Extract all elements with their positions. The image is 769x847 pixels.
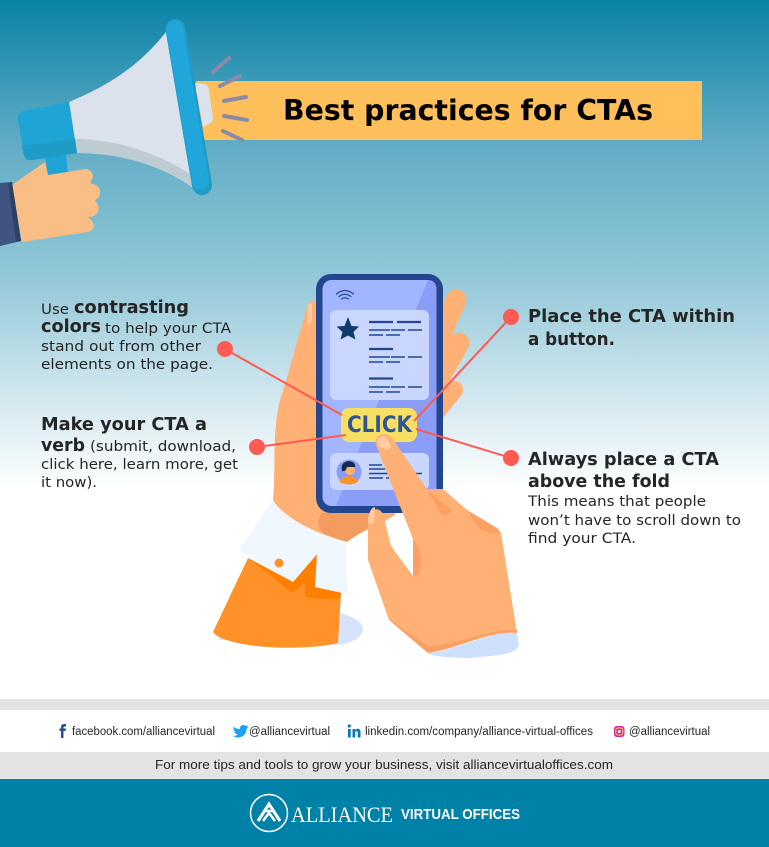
cuff button — [274, 558, 284, 568]
title banner — [196, 81, 702, 140]
left thumb nail — [307, 303, 312, 324]
back fingers — [436, 300, 459, 412]
profile card — [330, 453, 429, 490]
text: make your CTA a verb: it now). — [41, 475, 97, 491]
illustration: hands holding phone — [213, 274, 519, 658]
linkedin text: linkedin.com/company/alliance-virtual-offices — [365, 726, 593, 738]
fingernails — [377, 436, 391, 449]
horn shade — [75, 139, 192, 187]
icon: star — [336, 317, 359, 340]
text: contrasting colors: colors — [41, 316, 101, 337]
text: above the fold: This means that people — [527, 494, 706, 510]
sound streaks — [213, 58, 247, 140]
horn — [69, 32, 192, 187]
sleeve fold — [248, 554, 341, 599]
text: contrasting colors: contrasting — [74, 297, 189, 318]
logo mark — [250, 794, 288, 832]
right hand — [368, 434, 517, 653]
screen sheen — [336, 280, 436, 506]
icon: linkedin — [348, 724, 360, 738]
tips band — [0, 752, 769, 779]
text: place CTA within a button: Place the CTA within — [528, 306, 735, 327]
text: contrasting colors: to help your CTA — [105, 321, 231, 337]
left hand palm — [273, 301, 395, 542]
text: make your CTA a verb: Make your CTA a — [41, 414, 207, 435]
handle — [45, 154, 68, 176]
phone — [316, 274, 443, 513]
card text lines — [369, 322, 422, 392]
footer divider band — [0, 699, 769, 710]
text: make your CTA a verb: (submit, download, — [90, 439, 236, 455]
text: make your CTA a verb — [41, 414, 239, 491]
icon: twitter — [233, 725, 248, 738]
palm shadow — [318, 510, 375, 542]
text: above the fold: Always place a CTA — [528, 449, 719, 470]
callout dots — [217, 309, 519, 466]
text: above the fold: find your CTA. — [528, 531, 636, 547]
text: place CTA within a button: a button. — [528, 329, 615, 350]
CLICK button — [341, 408, 417, 442]
icon: wifi — [336, 290, 354, 299]
text: place CTA within a button — [528, 306, 735, 350]
megaphone back cap — [195, 83, 213, 127]
text: contrasting colors: stand out from other — [41, 339, 201, 355]
avatar — [336, 460, 362, 484]
callout lines — [225, 317, 511, 458]
twitter text: @alliancevirtual — [249, 726, 330, 738]
title: Best practices for CTAs — [283, 94, 653, 127]
icon: facebook — [60, 724, 66, 738]
instagram text: @alliancevirtual — [629, 726, 710, 738]
text: above the fold — [527, 449, 741, 547]
shirt sleeve — [0, 182, 21, 246]
floor shadow — [213, 612, 363, 645]
phone body — [316, 274, 443, 513]
orange sleeve — [213, 558, 341, 648]
text: above the fold: above the fold — [528, 471, 670, 492]
megaphone body — [18, 102, 77, 160]
right sleeve — [428, 633, 519, 658]
text: above the fold: won’t have to scroll down to — [528, 513, 741, 529]
hand shade — [389, 489, 517, 653]
text: contrasting colors — [41, 297, 231, 373]
shirt cuff — [239, 500, 347, 594]
icon: instagram — [614, 726, 624, 737]
logo wordmark: ALLIANCE — [291, 802, 393, 827]
footer logo band — [0, 779, 769, 847]
CLICK label: CLICK — [347, 413, 413, 438]
fist — [12, 162, 100, 242]
text: make your CTA a verb: verb — [41, 435, 85, 456]
facebook text: facebook.com/alliancevirtual — [72, 726, 215, 738]
megaphone rim — [176, 29, 202, 185]
profile text lines — [369, 465, 422, 478]
text: contrasting colors: Use — [41, 302, 69, 318]
social links row — [60, 724, 710, 738]
content card — [330, 310, 429, 400]
logo tagline: VIRTUAL OFFICES — [401, 806, 520, 823]
text: make your CTA a verb: click here, learn more, get — [41, 457, 239, 473]
text: contrasting colors: elements on the page. — [41, 357, 213, 373]
icon: megaphone with hand — [0, 29, 247, 246]
tips text: For more tips and tools to grow your business, visit alliancevirtualoffices.com — [155, 757, 613, 772]
phone screen — [322, 280, 436, 506]
